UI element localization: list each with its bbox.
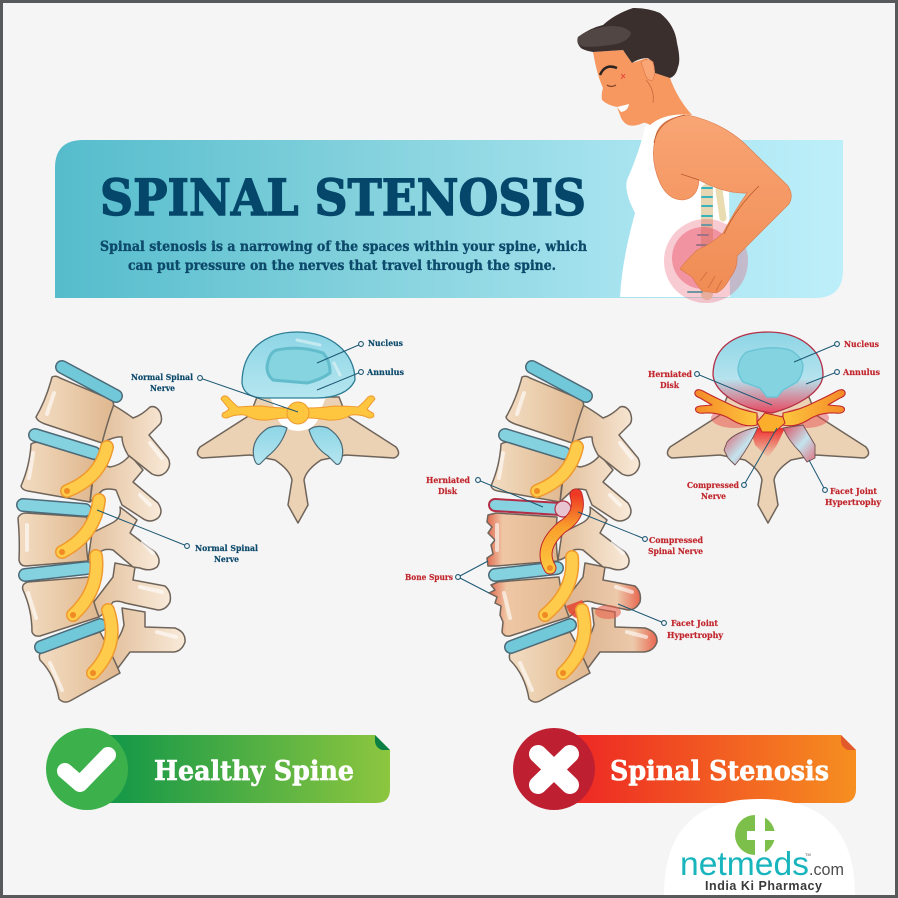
illustration: healthy side view spine: [18, 367, 185, 702]
vertebrae bodies: [487, 376, 590, 702]
nerves: [534, 447, 585, 676]
badge: healthy spine: Healthy Spine: [154, 756, 354, 787]
labels: spinal stenosis: Compressed: [649, 536, 703, 546]
labels: healthy spine: Normal Spinal: [195, 544, 259, 554]
labels: spinal stenosis: Hypertrophy: [825, 498, 882, 508]
labels: spinal stenosis: Disk: [660, 381, 680, 391]
ear: [641, 60, 654, 80]
logo: netmeds: netmeds: [680, 845, 809, 882]
logo: netmeds: .com: [809, 860, 844, 879]
vertebrae processes: [558, 405, 657, 668]
bone highlights: [27, 393, 176, 690]
disc nucleus: [738, 348, 803, 397]
labels: spinal stenosis: Facet Joint: [830, 487, 877, 497]
illustration: stenosis side view spine: [487, 367, 657, 702]
hair: [577, 8, 679, 78]
illustration: man holding lower back: [577, 8, 791, 303]
labels: spinal stenosis: Nucleus: [844, 340, 879, 350]
labels: healthy spine: [97, 339, 404, 565]
title: SPINAL STENOSIS: [100, 168, 586, 227]
spinal canal: [270, 397, 326, 431]
disc annulus: [242, 332, 355, 398]
badge: spinal stenosis: [513, 728, 856, 810]
labels: spinal stenosis: Facet Joint: [671, 619, 718, 629]
labels: spinal stenosis: Hypertrophy: [667, 631, 724, 641]
badge: healthy spine: [46, 728, 390, 810]
description text: can put pressure on the nerves that travel through the spine.: [128, 258, 556, 274]
nerves: [59, 447, 112, 676]
compressed nerve: [695, 390, 845, 432]
labels: spinal stenosis: Disk: [438, 487, 458, 497]
leader lines: [97, 344, 361, 546]
vertebrae processes: [88, 405, 185, 668]
logo icon: [735, 812, 777, 858]
discs: [23, 367, 116, 647]
pain circles: [664, 219, 748, 303]
labels: healthy spine: Nerve: [214, 555, 239, 565]
labels: healthy spine: Annulus: [366, 368, 404, 378]
vertebrae bodies: [18, 376, 120, 702]
spine in back: [688, 188, 723, 294]
panel: title banner: [55, 140, 843, 298]
facet joint hypertrophy redness: [566, 600, 585, 618]
illustration: healthy top view vertebra: [197, 332, 399, 523]
labels: spinal stenosis: Herniated: [648, 370, 692, 380]
logo: netmeds: TM: [805, 852, 811, 857]
bone: [667, 397, 869, 523]
neck and face: [593, 50, 692, 126]
logo: netmeds: [664, 799, 855, 895]
logo: netmeds: India Ki Pharmacy: [705, 879, 822, 893]
discs: [495, 367, 586, 647]
disc annulus: [713, 332, 823, 413]
labels: spinal stenosis: Herniated: [426, 476, 470, 486]
facet hypertrophy: [724, 425, 815, 465]
labels: healthy spine: Normal Spinal: [131, 373, 194, 383]
labels: spinal stenosis: Annulus: [842, 368, 880, 378]
labels: healthy spine: Nucleus: [368, 339, 403, 349]
nerve redness: [711, 408, 829, 428]
bone: [197, 397, 399, 523]
bone highlights: [497, 393, 646, 690]
labels: spinal stenosis: Compressed: [687, 481, 739, 491]
description text: Spinal stenosis is a narrowing of the spaces within your spine, which: [100, 239, 587, 255]
nerve: [221, 396, 375, 424]
labels: healthy spine: Nerve: [150, 384, 175, 394]
illustration: stenosis top view vertebra: [667, 332, 869, 523]
labels: spinal stenosis: Spinal Nerve: [648, 547, 703, 557]
badge: spinal stenosis: Spinal Stenosis: [610, 756, 829, 787]
labels: spinal stenosis: Bone Spurs: [405, 573, 453, 583]
labels: spinal stenosis: [405, 340, 882, 641]
compressed canal redness: [750, 428, 785, 458]
herniated bulge: [555, 501, 571, 517]
labels: spinal stenosis: Nerve: [701, 492, 726, 502]
disc nucleus: [267, 348, 330, 383]
facets: [253, 426, 343, 464]
description text: [100, 239, 587, 274]
arm and forearm: [653, 115, 791, 293]
leader lines: [458, 344, 837, 623]
eyebrow, eye, mouth: [600, 67, 617, 75]
hair highlight: [577, 26, 631, 47]
